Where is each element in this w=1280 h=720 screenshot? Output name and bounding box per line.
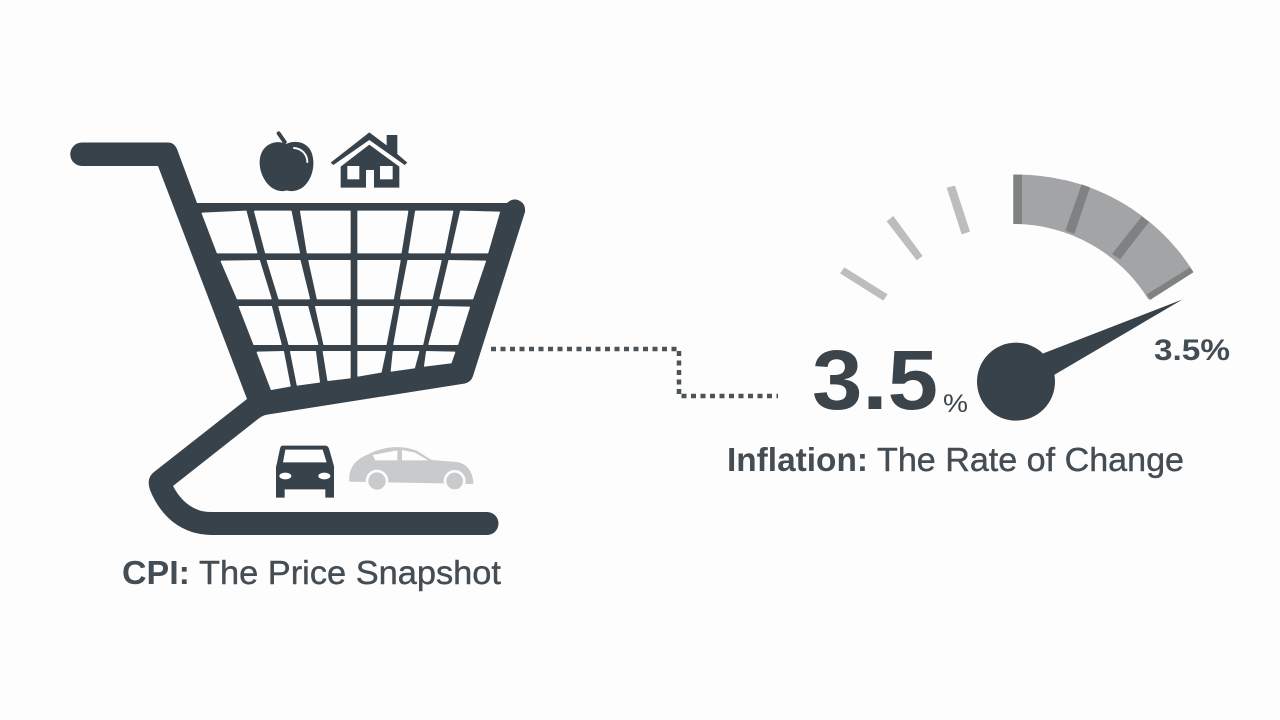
gauge ticks <box>840 186 970 301</box>
value: big 3.5 percent: % <box>943 390 968 418</box>
value: gauge reading: 3.5% <box>1154 334 1230 367</box>
dotted connector arrow <box>491 349 778 396</box>
heading: inflation label: The Rate of Change <box>877 441 1184 478</box>
icon: shopping cart <box>70 132 525 535</box>
gauge arc dividers <box>1013 175 1193 300</box>
cart frame <box>70 142 525 535</box>
icon: dark car <box>276 446 334 498</box>
heading: inflation label <box>727 441 1184 478</box>
gauge needle <box>977 299 1183 421</box>
heading: inflation label: Inflation: <box>727 441 868 478</box>
heading: CPI label: CPI: <box>122 554 190 591</box>
icon: light car <box>349 447 473 491</box>
gauge arc band <box>1013 175 1193 299</box>
value: big 3.5 percent: 3.5 <box>812 333 938 427</box>
heading: CPI label: The Price Snapshot <box>199 554 501 591</box>
icon: apple <box>260 133 313 191</box>
icon: house <box>331 132 407 188</box>
cart basket cells <box>202 211 499 389</box>
chart: gauge <box>840 175 1193 421</box>
